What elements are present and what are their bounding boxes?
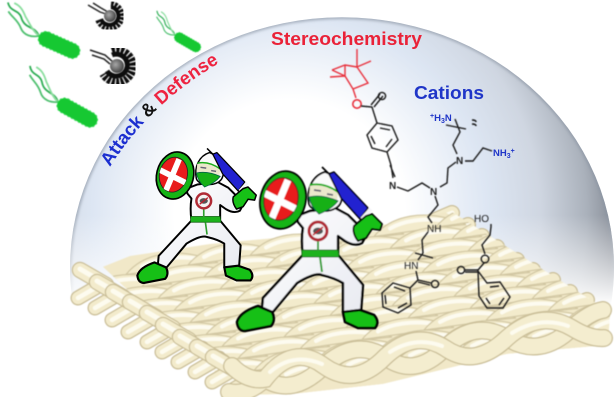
dome (60, 17, 615, 311)
bacteria (0, 1, 207, 130)
back strand ends (426, 213, 603, 337)
molecule: dendrimer backbone: N (430, 187, 437, 198)
left strand ends lower row (78, 284, 253, 392)
label: NH3+: 3 (507, 153, 511, 160)
left strand ends upper row (80, 269, 239, 372)
bacterium 3 (18, 64, 106, 130)
molecule: dendrimer backbone: N (389, 181, 396, 192)
fabric mesh (78, 206, 615, 395)
small soldier (137, 148, 256, 283)
label: NH3+: + (511, 148, 515, 155)
label: H3N+: 3 (441, 118, 445, 125)
label: H3N+: H (434, 113, 441, 124)
nanoparticle 2 (90, 50, 133, 82)
label: H3N+: N (445, 113, 452, 124)
label: H3N+: + (430, 113, 434, 120)
bacterium 1 (0, 1, 87, 61)
nanoparticle 1 (88, 3, 122, 28)
woven surface (80, 206, 615, 395)
twisted front rope (229, 310, 604, 393)
heading: Cations: Cations (414, 82, 484, 103)
molecule: dendrimer backbone: HO (474, 214, 489, 225)
heading: Attack & Defense: Attack & Defense (102, 56, 218, 167)
bacterium 2 (149, 10, 207, 54)
label: NH3+: NH (493, 148, 507, 159)
molecule: dendrimer backbone (361, 92, 510, 313)
molecule: dendrimer backbone: NH (427, 224, 441, 235)
large soldier (237, 166, 382, 331)
molecule: dendrimer backbone: HN (404, 261, 418, 272)
molecule: dendrimer backbone: N (456, 156, 463, 167)
heading: Stereochemistry: Stereochemistry (271, 28, 423, 49)
molecule: bornyl group (330, 49, 371, 108)
